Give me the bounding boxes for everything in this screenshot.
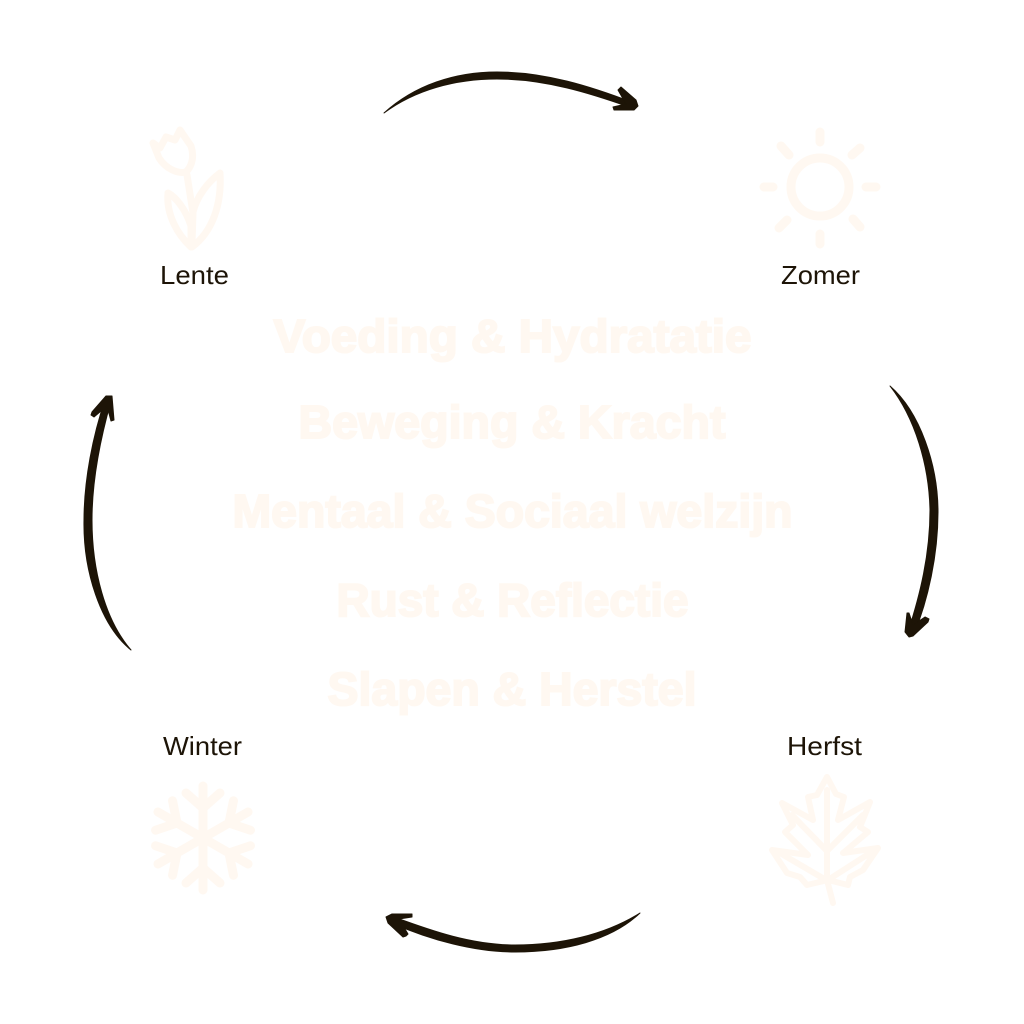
label: Winter: Winter [163,731,242,761]
icon: snowflake (Winter) [149,786,257,890]
label: Zomer: Zomer [781,260,860,290]
label: Herfst: Herfst [787,731,863,761]
arrow: top, Lente to Zomer [384,72,638,113]
theme: Slapen & Herstel: Slapen & Herstel [328,663,696,715]
theme: Beweging & Kracht: Beweging & Kracht [298,396,726,448]
label: Lente: Lente [160,260,229,290]
arrow: right, Zomer to Herfst [890,386,938,637]
theme: Mentaal & Sociaal welzijn: Mentaal & Sociaal welzijn [232,485,793,537]
theme: Voeding & Hydratatie: Voeding & Hydratatie [274,310,752,362]
icon: maple leaf (Herfst) [772,777,878,903]
icon: sun (Zomer) [764,132,876,244]
arrow: left, Winter to Lente [84,396,131,650]
arrow: bottom, Herfst to Winter [386,913,640,952]
theme: Rust & Reflectie: Rust & Reflectie [336,574,688,626]
central list of themes [232,310,793,715]
icon: tulip (Lente) [153,130,220,247]
